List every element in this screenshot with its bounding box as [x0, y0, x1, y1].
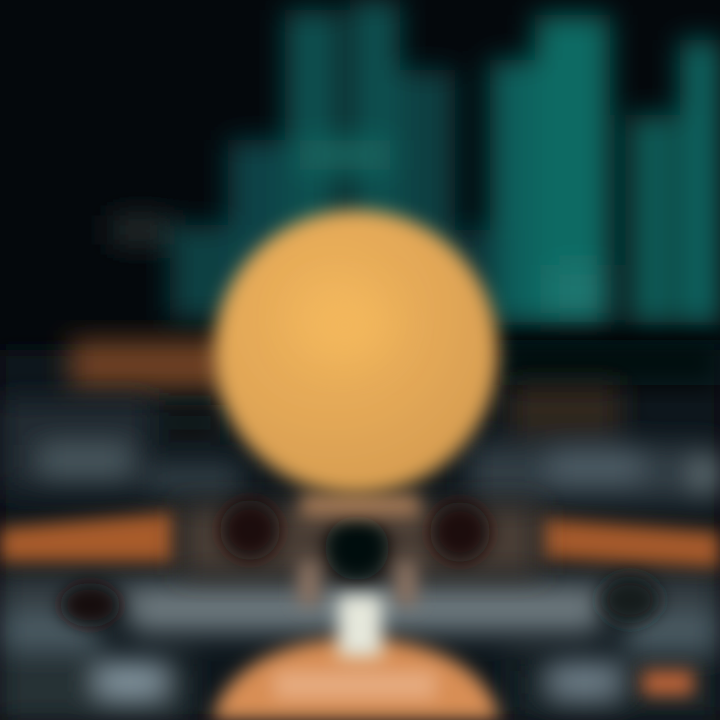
- orange glow left of coin: [70, 340, 230, 390]
- soft midsection behind keys: [180, 505, 540, 575]
- teal bar chart: [110, 0, 720, 325]
- blurred keyboard rows: [0, 385, 720, 720]
- dark round keys: [60, 500, 660, 627]
- orange bands: [0, 512, 720, 696]
- lower dark field: [0, 350, 720, 720]
- coin: [214, 210, 498, 494]
- lower orange dome: [212, 638, 500, 720]
- coin body: [214, 210, 498, 494]
- glowing white stem: [298, 495, 420, 657]
- coin centre highlight: [300, 290, 390, 360]
